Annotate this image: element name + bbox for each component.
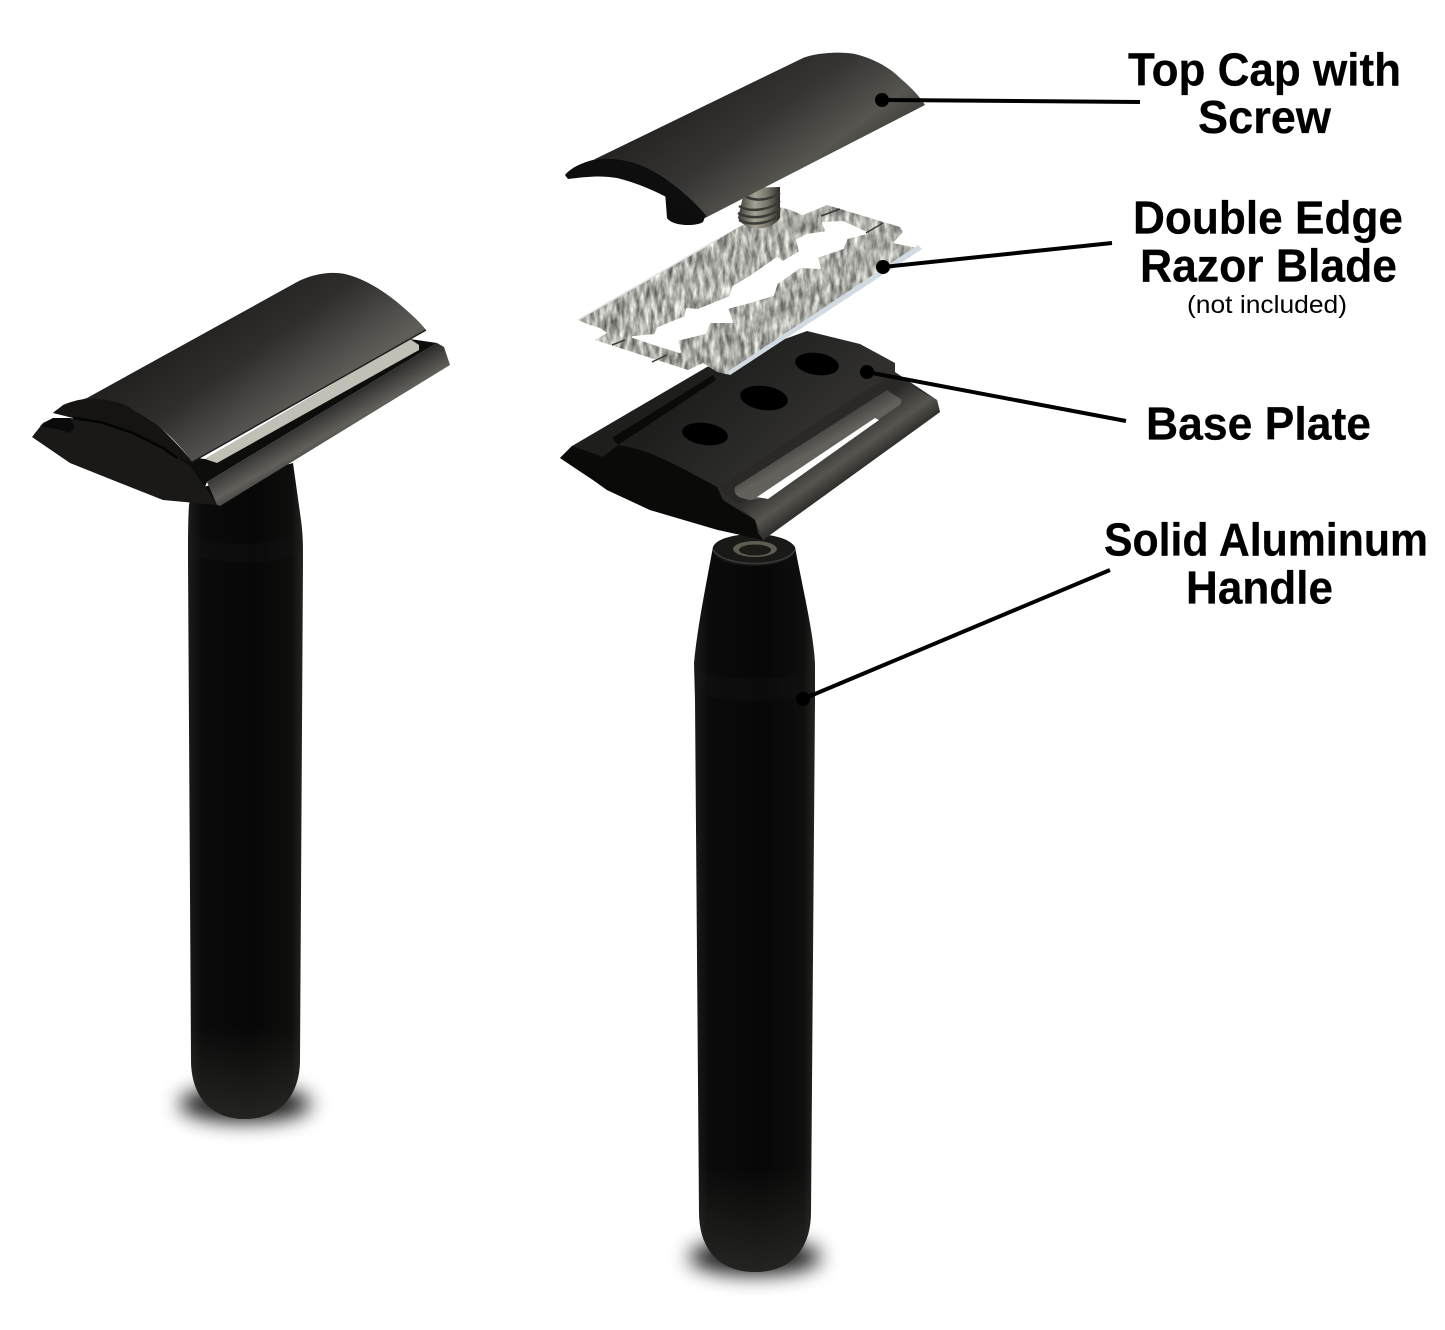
handle: exploded razor [694,534,815,1272]
slot recess [735,390,902,500]
label: Double Edge [1133,192,1403,244]
cap end face [565,159,707,218]
top cap [565,53,925,225]
callout: razor blade [876,192,1403,319]
shadow: assembled razor [179,1086,311,1122]
callout: base plate [860,365,1371,450]
blade slot opening [757,418,879,499]
label: (not included) [1187,291,1347,319]
blade edge: assembled razor [205,339,419,463]
label: Solid Aluminum [1104,514,1428,566]
label [1133,192,1403,319]
handle: assembled razor [188,463,303,1119]
top cap: assembled razor [53,273,426,462]
screw holes [681,420,729,448]
base plate: exploded razor [560,331,940,540]
callout: top cap [875,44,1401,143]
cap body [565,53,925,217]
cap foot [665,192,710,225]
callout: handle [796,514,1428,706]
label [1128,44,1401,143]
label: Handle [1186,562,1333,614]
left slot [612,375,716,445]
label: Base Plate [1146,398,1371,450]
shadow: exploded razor [689,1239,821,1275]
razor blade [578,205,922,375]
leader line [875,93,1140,107]
screw [738,187,780,228]
base plate: assembled razor [32,339,450,506]
exploded razor [560,53,940,1275]
leader line [860,365,1126,421]
leader line [796,570,1110,706]
label [1104,514,1428,614]
assembled razor [32,273,450,1122]
label: Top Cap with [1128,44,1401,96]
label: Screw [1198,91,1331,143]
rail [717,375,940,540]
leader line [876,243,1112,274]
label: Razor Blade [1140,240,1397,292]
